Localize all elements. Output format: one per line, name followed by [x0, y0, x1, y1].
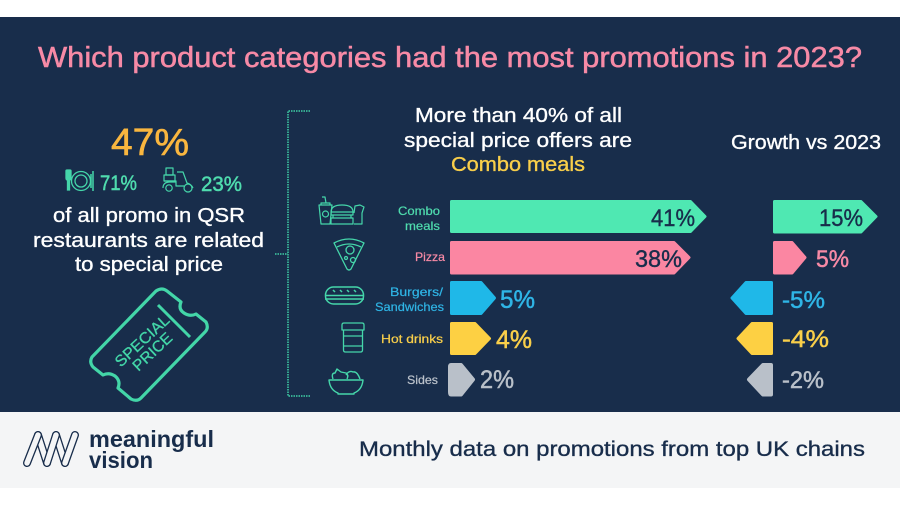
logo: meaningful vision	[27, 426, 214, 473]
growth value 15%: 15%	[819, 205, 863, 232]
bar	[452, 324, 490, 354]
growth bar: combo +15%	[774, 202, 876, 232]
logo wordmark: vision	[89, 447, 153, 473]
icon: plate and cutlery	[66, 170, 93, 191]
label	[398, 204, 440, 233]
growth bar: pizza +5%	[774, 242, 805, 273]
logo mark	[27, 435, 75, 463]
icon: sandwich	[325, 287, 364, 304]
description text	[33, 204, 264, 276]
bar	[452, 202, 705, 232]
icon: special price ticket	[91, 289, 207, 400]
row: hot drinks	[342, 323, 532, 354]
dotted bracket	[275, 111, 310, 396]
panel: left summary	[33, 122, 264, 400]
icon: pizza	[334, 239, 364, 270]
footer tagline: Monthly data on promotions from top UK chains	[359, 437, 865, 461]
stat 71%: 71%	[100, 171, 137, 195]
icon: salad bowl	[329, 369, 363, 394]
description text: to special price	[75, 253, 223, 276]
logo wordmark	[89, 426, 214, 473]
row: combo meals	[319, 197, 705, 233]
bar	[450, 365, 473, 394]
icon: cup	[342, 323, 364, 352]
heading: more than 40%: special price offers are	[404, 129, 632, 152]
label: Combo	[398, 204, 440, 218]
bar	[452, 282, 494, 314]
heading: growth: Growth vs 2023	[731, 132, 881, 154]
row: burgers/sandwiches	[325, 282, 535, 314]
growth value -5%: -5%	[782, 287, 825, 314]
icon: delivery scooter	[163, 168, 193, 192]
growth value -4%: -4%	[782, 326, 829, 353]
row: sides	[329, 365, 514, 394]
heading: more than 40%: More than 40% of all	[415, 104, 622, 127]
label	[375, 285, 444, 314]
logo wordmark: meaningful	[89, 426, 214, 452]
label: Burgers/	[390, 285, 444, 299]
row: pizza	[334, 239, 689, 273]
title: Which product categories had the most promotions in 2023?	[38, 42, 862, 74]
icon: special price ticket: PRICE	[129, 330, 176, 375]
label: Hot drinks	[381, 332, 443, 346]
value: 38%	[635, 246, 682, 273]
value: 5%	[500, 286, 535, 314]
value: 2%	[480, 366, 514, 394]
growth bar: burgers -5%	[732, 282, 772, 314]
growth value 5%: 5%	[816, 246, 849, 273]
description text: restaurants are related	[33, 229, 264, 252]
description text: of all promo in QSR	[53, 204, 245, 227]
heading: more than 40%: Combo meals	[451, 153, 585, 176]
panel: footer	[0, 412, 900, 488]
panel: navy background	[0, 17, 900, 412]
stat 23%: 23%	[201, 172, 242, 196]
label: meals	[405, 219, 440, 233]
growth bar: sides -2%	[749, 365, 771, 394]
label: Sides	[407, 373, 438, 387]
icon: special price ticket: SPECIAL	[112, 312, 174, 371]
label: Pizza	[415, 250, 445, 264]
growth bar: hot drinks -4%	[738, 324, 772, 354]
growth value -2%: -2%	[782, 367, 824, 394]
heading: more than 40%	[404, 104, 632, 176]
big stat 47%: 47%	[111, 122, 189, 164]
value: 41%	[651, 205, 695, 232]
label: Sandwiches	[375, 300, 444, 314]
value: 4%	[496, 326, 532, 354]
icon: combo meal	[319, 197, 364, 224]
growth bars	[732, 202, 876, 394]
bar	[452, 242, 689, 273]
